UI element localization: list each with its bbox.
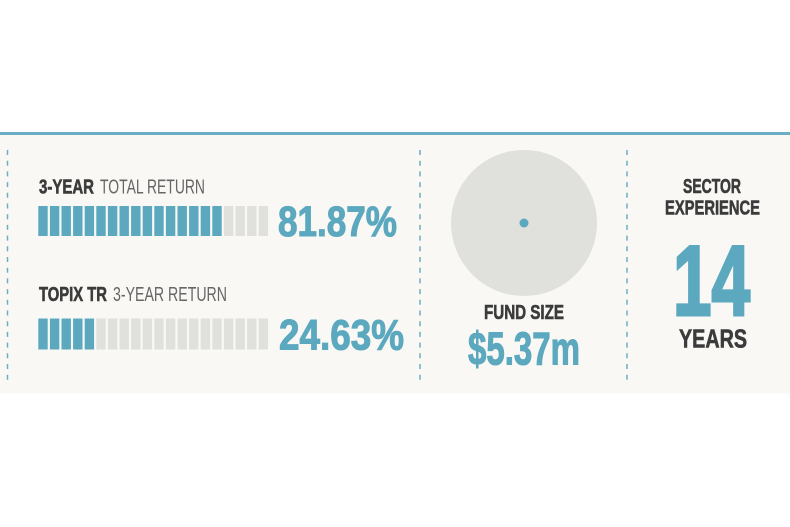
panel: background band bbox=[0, 134, 790, 394]
heading: TOPIX TR 3-year return bbox=[39, 284, 227, 306]
value: $5.37m: $5.37m bbox=[468, 322, 580, 374]
panel: 3-year total return bbox=[38, 176, 397, 246]
panel: TOPIX TR 3-year return bbox=[38, 284, 404, 360]
heading: TOPIX TR 3-year return: TOPIX TR bbox=[39, 284, 107, 306]
label: years: YEARS bbox=[679, 324, 747, 354]
value: 24.63%: 24.63% bbox=[279, 312, 404, 360]
top rule bbox=[0, 132, 790, 135]
heading: TOPIX TR 3-year return: 3-YEAR RETURN bbox=[113, 284, 227, 306]
heading: sector experience bbox=[665, 176, 760, 220]
dashed dividers bbox=[8, 150, 627, 380]
bar chart: 5 of 20 segments bbox=[38, 318, 268, 350]
panel: fund size bbox=[451, 150, 597, 374]
value: 14: 14 bbox=[673, 225, 750, 336]
heading: sector experience: SECTOR bbox=[683, 176, 741, 198]
heading: 3-year total return: 3-YEAR bbox=[39, 176, 94, 198]
heading: 3-year total return bbox=[39, 176, 205, 198]
value: 81.87%: 81.87% bbox=[278, 198, 397, 246]
chart: fund size circle bbox=[451, 150, 597, 296]
panel: sector experience bbox=[665, 176, 760, 354]
heading: fund size: FUND SIZE bbox=[484, 302, 564, 324]
bar chart: 16 of 20 segments bbox=[38, 206, 268, 236]
heading: 3-year total return: TOTAL RETURN bbox=[100, 176, 205, 198]
